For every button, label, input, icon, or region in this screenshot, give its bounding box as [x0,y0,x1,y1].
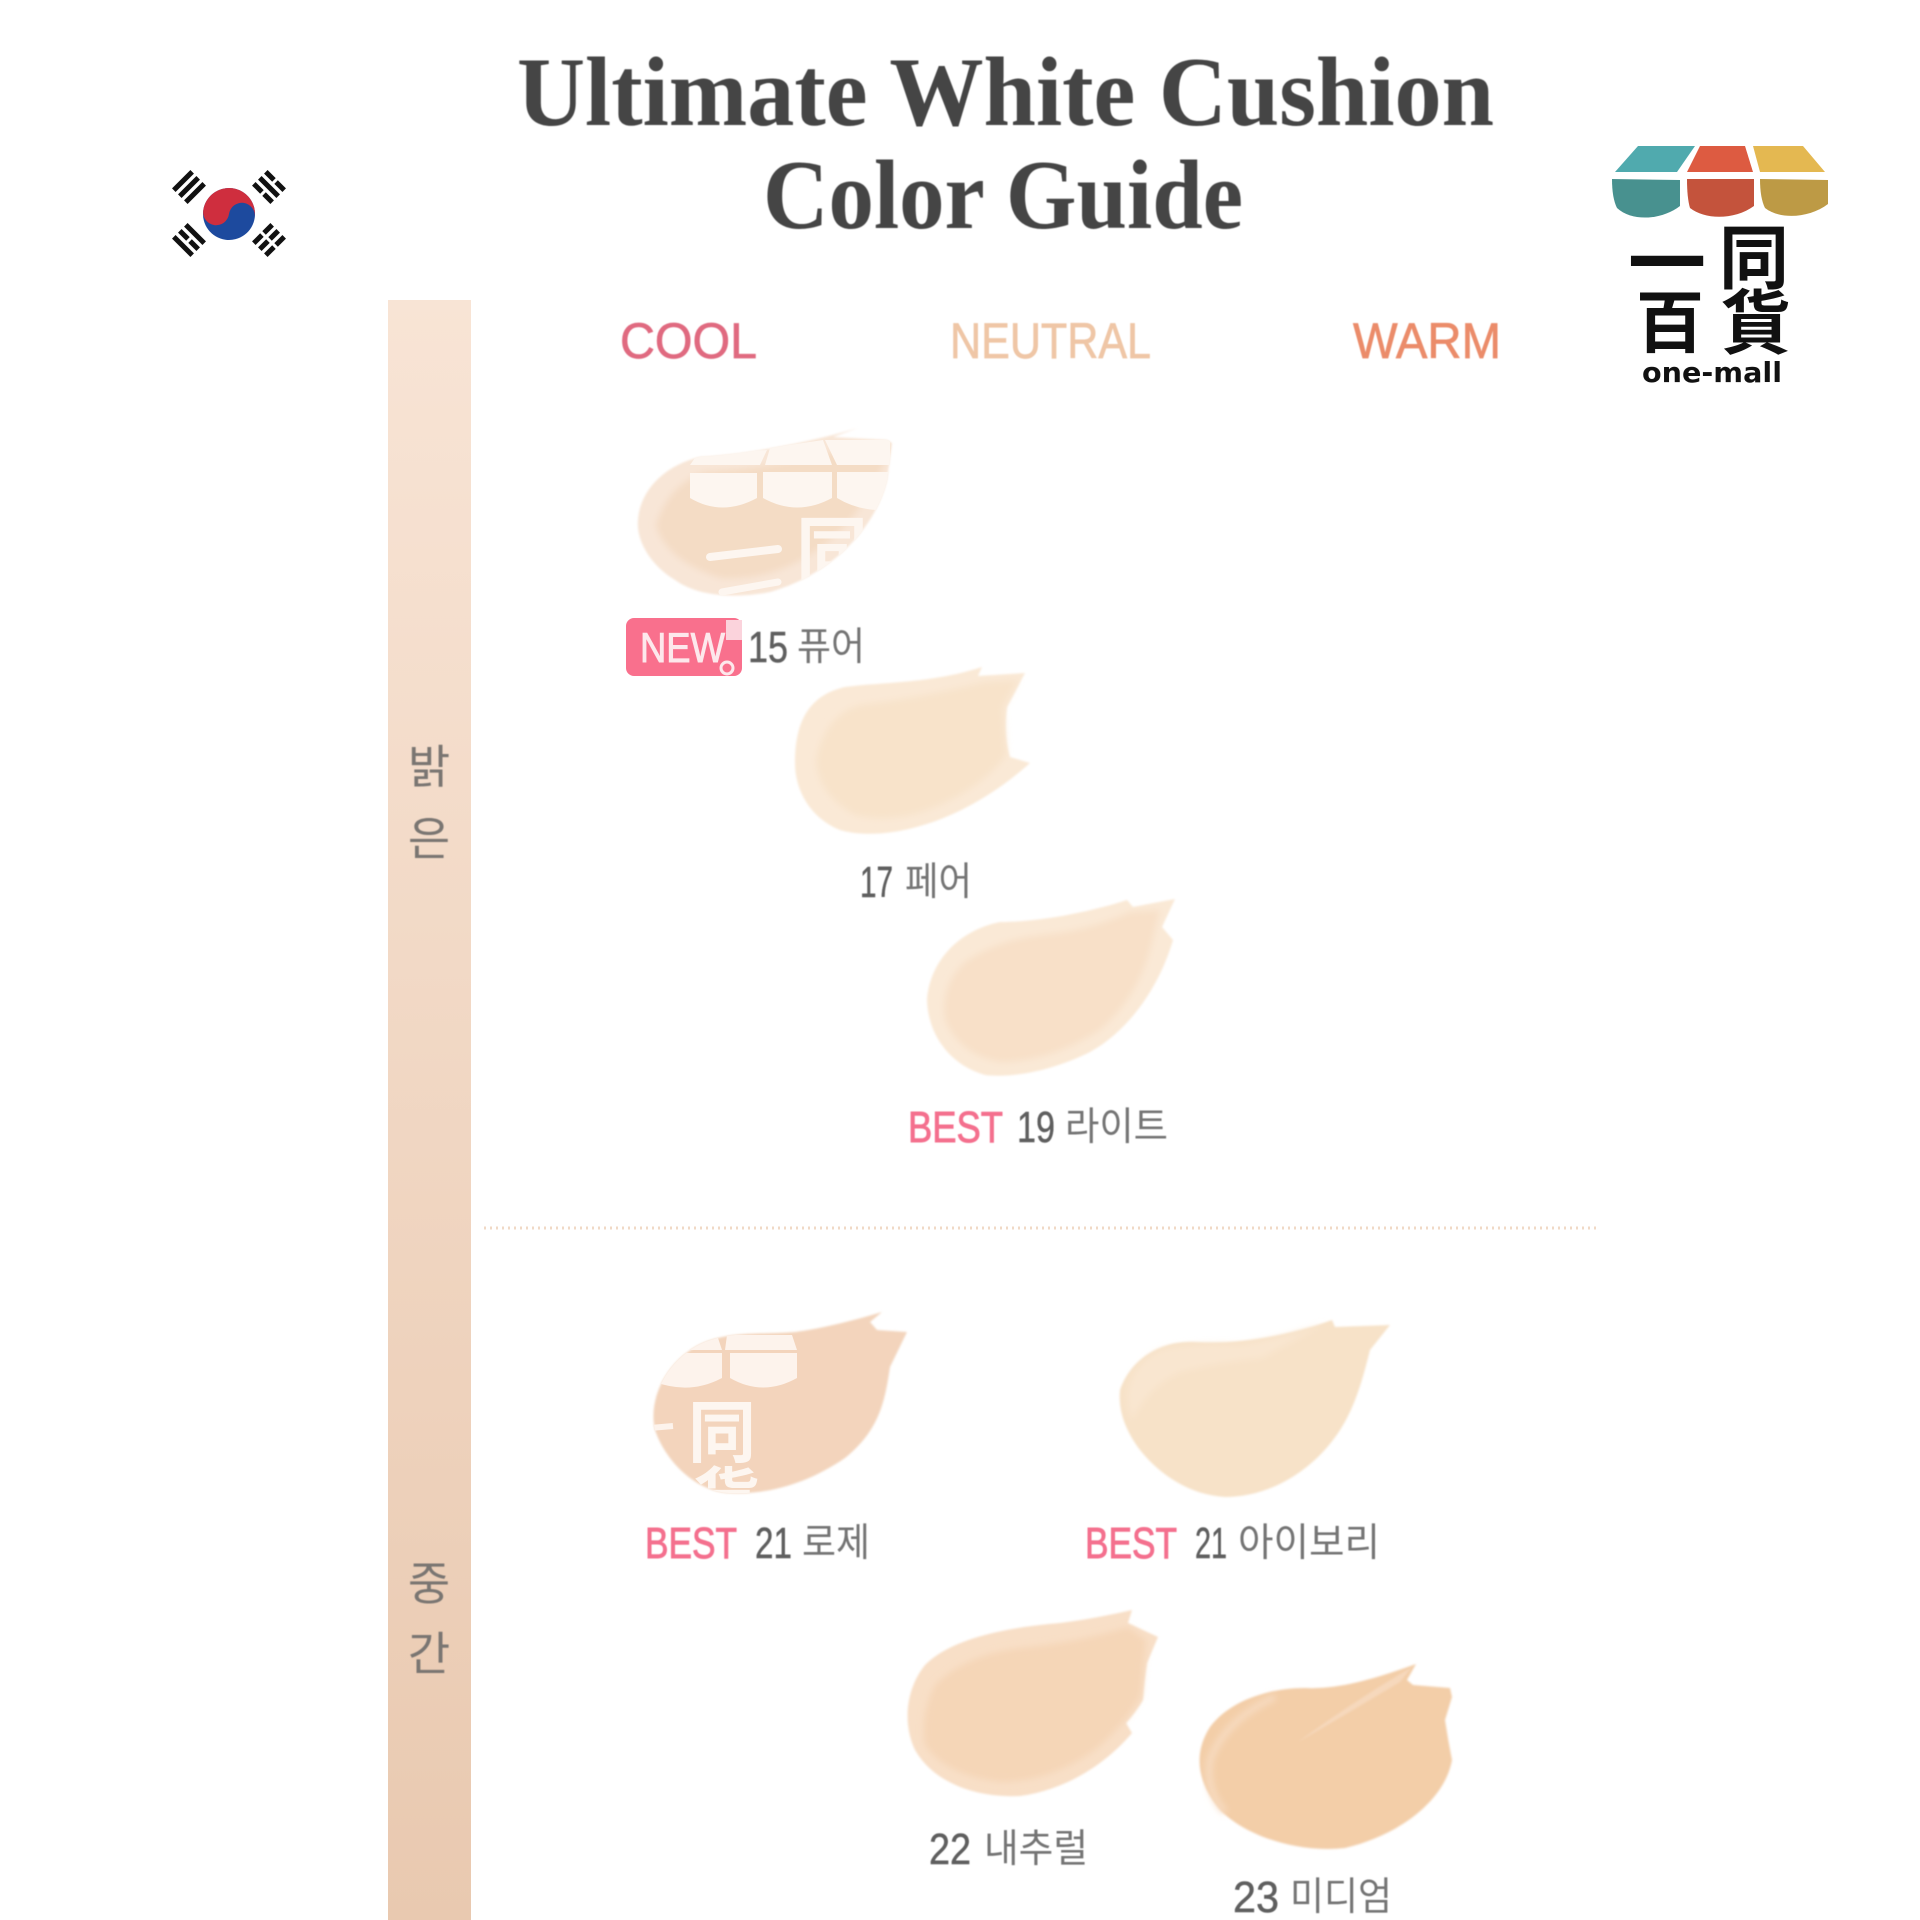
swatch: 19 light [927,899,1175,1076]
label: NEW 15 pure: 15 [748,623,788,672]
badge: NEW [626,618,742,676]
label: BEST 21 rose: 로제 [802,1522,870,1565]
label: BEST 19 light: BEST [908,1103,1003,1152]
label: BEST 19 light: 19 [1017,1103,1055,1152]
label: medium [408,1558,450,1680]
watermark: logo in swatch 15: 同 [796,512,868,592]
label: NEW 15 pure [626,618,865,676]
swatch: 21 ivory [1120,1320,1390,1497]
label: 22 natural [929,1825,1088,1874]
label: BEST 21 rose: 21 [755,1519,792,1568]
label: 22 natural: 내추럴 [984,1828,1088,1871]
logo wordmark: one-mall [1642,356,1782,389]
swatch: 15 pure [638,428,892,596]
swatch: 22 natural [908,1610,1158,1796]
panel: brightness bar [388,300,471,1920]
title: Ultimate White Cushion [517,38,1494,147]
label: 23 medium: 미디엄 [1290,1876,1392,1919]
label: BEST 21 rose [645,1519,870,1568]
label: 22 natural: 22 [929,1825,971,1874]
label: bright: 밝 [408,741,450,793]
icon: awning [1612,146,1828,218]
flag: South Korea [172,170,286,257]
label: bright [408,741,450,865]
swatch: 21 rose [652,1312,908,1494]
label: BEST 21 ivory: 21 [1195,1519,1227,1568]
watermark: logo in swatch 21: 同 [688,1396,756,1472]
label: medium: 간 [408,1628,450,1680]
logo wordmark: 貨 [1721,285,1791,363]
logo wordmark: 同 [1719,220,1789,298]
logo wordmark: 一 [1628,220,1706,308]
logo: one-mall storefront [1612,146,1828,389]
swatch: 23 medium [1200,1664,1452,1849]
watermark: logo in swatch 21: 貨 [694,1462,760,1536]
label: BEST 21 rose: BEST [645,1519,737,1568]
label: BEST 19 light: 라이트 [1065,1106,1168,1149]
label: BEST 21 ivory: 아이보리 [1238,1522,1380,1565]
swatch: 17 fair [795,667,1030,834]
title: Color Guide [763,141,1243,250]
label: 17 fair [860,858,972,907]
watermark: logo in swatch 21 [654,1335,797,1494]
label: NEW 15 pure: 퓨어 [797,626,865,669]
column headings: COOL [620,313,757,369]
column headings: NEUTRAL [950,313,1151,369]
label: BEST 21 ivory: BEST [1085,1519,1177,1568]
title [517,38,1494,250]
label: BEST 21 ivory [1085,1519,1380,1568]
label: medium: 중 [408,1558,450,1610]
label: BEST 19 light [908,1103,1168,1152]
label: 23 medium [1233,1873,1392,1920]
logo wordmark: 百 [1636,286,1704,362]
watermark: logo in swatch 15 [690,440,890,592]
label: bright: 은 [408,813,450,865]
badge: NEW: NEW [640,624,725,671]
label: 17 fair: 17 [860,858,893,907]
column headings: WARM [1353,313,1501,369]
label: 17 fair: 페어 [905,861,972,904]
logo wordmark [1628,220,1791,389]
column headings [620,313,1501,369]
